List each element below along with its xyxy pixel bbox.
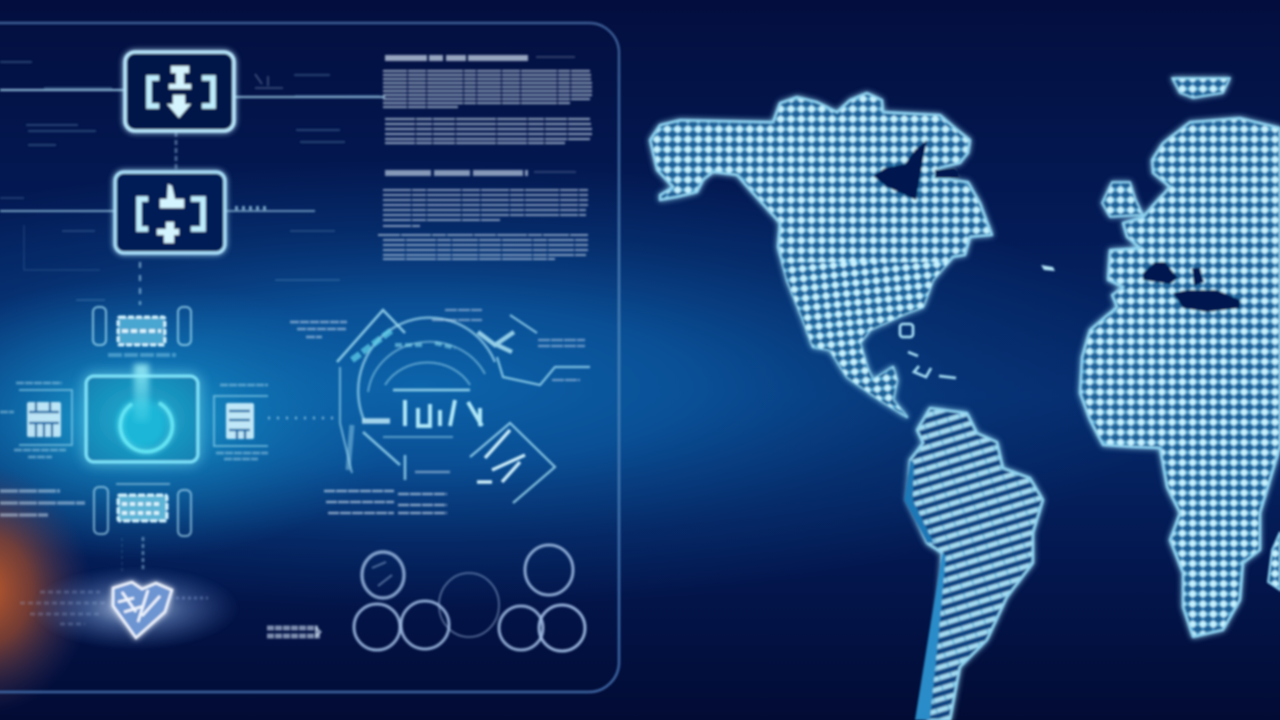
left module: [0, 383, 72, 457]
lower module: [0, 484, 191, 536]
UK island: [1102, 182, 1143, 217]
Europe and Africa: [1080, 118, 1280, 637]
hub diagram: [290, 310, 590, 513]
right module: [214, 385, 268, 459]
faint side labels: [0, 62, 380, 300]
circle cluster: [354, 545, 585, 651]
panel: holographic interface: [0, 23, 619, 692]
South America: [907, 408, 1043, 720]
north island: [1172, 78, 1230, 98]
South America side edge: [915, 553, 946, 720]
glowing heart graphic: [10, 555, 260, 655]
Caribbean islands: [900, 324, 956, 378]
text block 2: [378, 172, 588, 259]
Madagascar: [1268, 532, 1280, 590]
panel frame: [0, 23, 619, 692]
world map: [650, 78, 1280, 720]
central glowing power box: [86, 364, 198, 462]
flow box 1: [125, 52, 234, 131]
flow box 2: [115, 172, 225, 253]
text block 1: [383, 57, 592, 143]
Hudson Bay: [873, 140, 927, 200]
upper module: [93, 307, 191, 355]
small arrow label: [267, 625, 322, 639]
Mediterranean Sea: [1143, 262, 1240, 312]
connector lines: [0, 90, 385, 572]
North America: [650, 93, 1000, 422]
small Atlantic island: [1041, 265, 1055, 271]
